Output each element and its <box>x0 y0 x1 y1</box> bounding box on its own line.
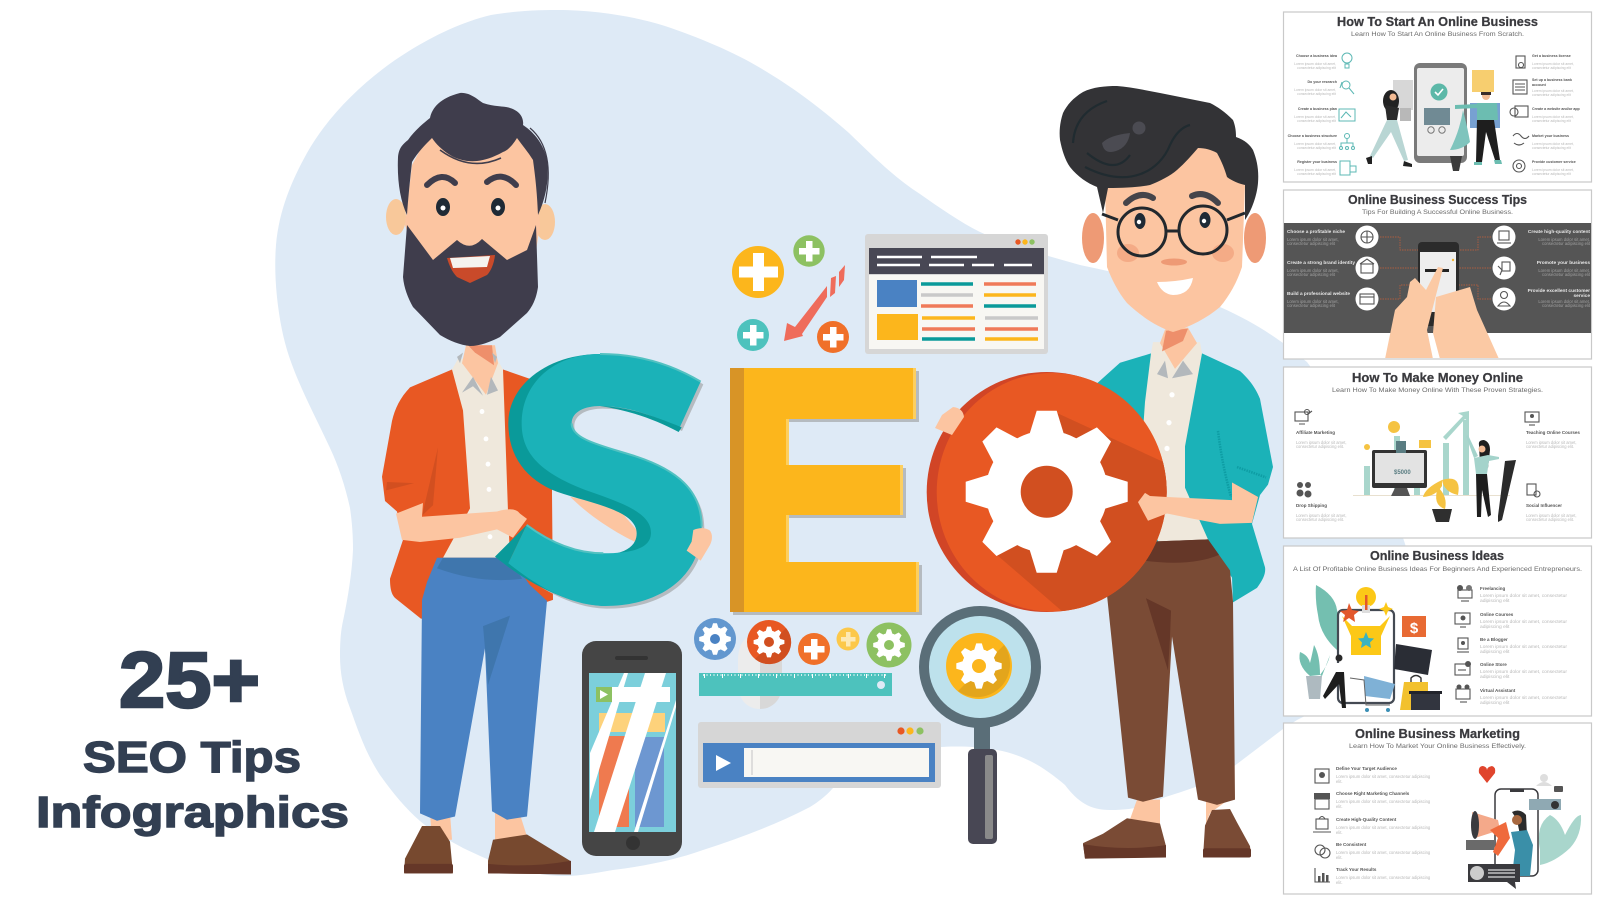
panel 1 left list: Choose a business structure <box>1288 134 1337 138</box>
panel 2 left list <box>1287 229 1355 308</box>
panel 4 woman and cart <box>1323 654 1395 712</box>
panel 4 list <box>1480 586 1567 706</box>
panel 2 subtitle: Tips For Building A Successful Online Business. <box>1362 209 1513 216</box>
panel 5 list: Lorem ipsum dolor sit amet, consectetur adipiscing <box>1336 799 1431 804</box>
panel 2 right list: service <box>1573 293 1590 299</box>
panel 5 list: Choose Right Marketing Channels <box>1336 791 1410 796</box>
panel 2 left list: Lorem ipsum dolor sit amet, <box>1287 268 1339 273</box>
panel 1 right list: account <box>1532 83 1547 87</box>
panel: How To Start An Online Business <box>1284 12 1592 182</box>
panel 3 plant <box>1364 421 1459 522</box>
panel 1 left list: Lorem ipsum dolor sit amet, <box>1294 142 1336 146</box>
panel 2 right list: consectetur adipiscing elit <box>1542 303 1591 308</box>
letter O gear <box>927 372 1185 620</box>
panel 1 right list: Lorem ipsum dolor sit amet, <box>1532 142 1574 146</box>
panel 5 heading: Online Business Marketing <box>1355 727 1520 741</box>
panel 3 text items: Lorem ipsum dolor sit amet, <box>1526 440 1577 445</box>
panel 1 right list: Set up a business bank <box>1532 78 1572 82</box>
panel 3 monitor <box>1372 441 1427 496</box>
man with beard: body <box>382 345 571 874</box>
panel 4 list: Lorem ipsum dolor sit amet, consectetur <box>1480 669 1567 675</box>
panel 1 right list: consectetur adipiscing elit <box>1532 66 1571 70</box>
panel 1 right list: consectetur adipiscing elit <box>1532 172 1571 176</box>
panel 3 baseline <box>1353 495 1510 496</box>
panel 5 list: elit. <box>1336 779 1343 784</box>
panel 2 right list <box>1528 229 1591 308</box>
panel 4 list: Lorem ipsum dolor sit amet, consectetur <box>1480 593 1567 599</box>
man with beard: arm and hand <box>396 503 527 542</box>
panel 5 list: elit. <box>1336 880 1343 885</box>
phone with hash <box>582 641 682 856</box>
panel 3 text items: Social Influencer <box>1526 503 1562 508</box>
panel 4 subtitle: A List Of Profitable Online Business Ideas For Beginners And Experienced Entrepreneurs. <box>1293 566 1582 573</box>
panel: Online Business Marketing <box>1284 723 1592 894</box>
man with glasses: head <box>1060 86 1266 332</box>
panel 3 text items <box>1296 430 1580 522</box>
panel 1 subtitle: Learn How To Start An Online Business From Scratch. <box>1351 31 1524 38</box>
panel 5 list: Define Your Target Audience <box>1336 766 1397 771</box>
panel 1 right list: Get a business license <box>1532 54 1571 58</box>
panel 4 list: Lorem ipsum dolor sit amet, consectetur <box>1480 695 1567 701</box>
panel 4 list: adipiscing elit <box>1480 649 1510 655</box>
green gear icon <box>866 622 912 668</box>
panel 5 list: Lorem ipsum dolor sit amet, consectetur adipiscing <box>1336 774 1431 779</box>
panel 3 text items: Affiliate Marketing <box>1296 430 1335 435</box>
panel 2 left list: Lorem ipsum dolor sit amet, <box>1287 237 1339 242</box>
panel 2 left list: Choose a profitable niche <box>1287 229 1345 235</box>
panel 1 right list: Lorem ipsum dolor sit amet, <box>1532 168 1574 172</box>
panel 2 right list: Lorem ipsum dolor sit amet, <box>1538 268 1590 273</box>
panel 1 left list: consectetur adipiscing elit <box>1297 119 1336 123</box>
panel 5 phone <box>1495 789 1561 876</box>
panel 2 phone and hands <box>1385 242 1499 359</box>
blue gear icon <box>694 618 736 660</box>
panel 1 right list: Create a website and/or app <box>1532 107 1581 111</box>
man with glasses: arm and hands <box>935 407 1258 524</box>
panel 1 right list <box>1532 54 1581 176</box>
panel 1 right list: Lorem ipsum dolor sit amet, <box>1532 89 1574 93</box>
panel 5 subtitle: Learn How To Market Your Online Business Effectively. <box>1349 743 1526 750</box>
panel 5 list: Lorem ipsum dolor sit amet, consectetur adipiscing <box>1336 875 1431 880</box>
search box window <box>698 722 941 788</box>
panel 4 list: Online Courses <box>1480 612 1514 617</box>
panel 1 right list: consectetur adipiscing elit <box>1532 119 1571 123</box>
panel 4 dollar card <box>1402 616 1426 637</box>
panel 1 right list: consectetur adipiscing elit <box>1532 93 1571 97</box>
arrow <box>784 265 845 341</box>
orange gear icon <box>747 620 791 664</box>
panel 5 list <box>1336 766 1431 885</box>
panel 1 left list: Register your business <box>1297 160 1337 164</box>
panel 2 left list: Lorem ipsum dolor sit amet, <box>1287 299 1339 304</box>
panel: How To Make Money Online <box>1284 367 1592 538</box>
panel 5 list: Lorem ipsum dolor sit amet, consectetur adipiscing <box>1336 825 1431 830</box>
panel 2 right list: consectetur adipiscing elit <box>1542 272 1591 277</box>
panel 4 list: adipiscing elit <box>1480 674 1510 680</box>
panel 3 text items: consectetur adipiscing elit. <box>1526 517 1574 522</box>
panel 1 heading: How To Start An Online Business <box>1337 15 1538 29</box>
magnifying glass <box>919 606 1041 844</box>
panel 4 icons <box>1455 585 1472 702</box>
panel 3 bars <box>1364 411 1469 496</box>
panel 2 right list: consectetur adipiscing elit <box>1542 241 1591 246</box>
panel 4 list: adipiscing elit <box>1480 598 1510 604</box>
panel 3 woman and pen <box>1466 435 1516 522</box>
panel 2 left list: Build a professional website <box>1287 291 1350 297</box>
panel 1 left list: Lorem ipsum dolor sit amet, <box>1294 115 1336 119</box>
panel 5 list: Lorem ipsum dolor sit amet, consectetur adipiscing <box>1336 850 1431 855</box>
panel 4 list: Be a Blogger <box>1480 637 1508 642</box>
panel 4 list: Lorem ipsum dolor sit amet, consectetur <box>1480 644 1567 650</box>
panel 2 dark band <box>1284 223 1591 333</box>
panel 4 list: Lorem ipsum dolor sit amet, consectetur <box>1480 619 1567 625</box>
panel 4 bag and box <box>1400 676 1442 710</box>
panel 3 text items: consectetur adipiscing elit. <box>1296 517 1344 522</box>
mouse <box>738 633 782 709</box>
panel 1 right list: Lorem ipsum dolor sit amet, <box>1532 62 1574 66</box>
panel 5 list: Create High-Quality Content <box>1336 817 1397 822</box>
panel 3 heading: How To Make Money Online <box>1352 371 1523 385</box>
plus icons <box>732 235 849 353</box>
panel 2 heading: Online Business Success Tips <box>1348 193 1527 207</box>
panel 5 list: elit. <box>1336 855 1343 860</box>
panel 4 list: Freelancing <box>1480 586 1506 591</box>
yellow plus <box>836 628 860 650</box>
panel 3 text items: consectetur adipiscing elit. <box>1526 444 1574 449</box>
panel 5 leaf and heart <box>1479 766 1581 865</box>
panel 3 text items: Lorem ipsum dolor sit amet, <box>1296 513 1347 518</box>
panel: Online Business Success Tips <box>1284 190 1592 359</box>
panel 3 text items: Drop Shipping <box>1296 503 1327 508</box>
background blob <box>275 10 1413 876</box>
letter S <box>495 354 712 609</box>
panel 2 left list: Create a strong brand identity <box>1287 260 1355 266</box>
panel 4 plants <box>1299 585 1340 699</box>
panel 2 right list: Lorem ipsum dolor sit amet, <box>1538 237 1590 242</box>
panel 5 list: Track Your Results <box>1336 867 1377 872</box>
panel 1 right list: Provide customer service <box>1532 160 1576 164</box>
panel 1 right list: Lorem ipsum dolor sit amet, <box>1532 115 1574 119</box>
panel 2 right list: Lorem ipsum dolor sit amet, <box>1538 299 1590 304</box>
panel: Online Business Ideas <box>1284 546 1592 716</box>
orange plus <box>798 633 830 665</box>
man with glasses: body <box>1083 328 1273 859</box>
panel 4 list: Virtual Assistant <box>1480 688 1516 693</box>
panel 5 list: elit. <box>1336 830 1343 835</box>
panel 4 credit card <box>1394 644 1432 675</box>
panel 4 list: Online Store <box>1480 662 1507 667</box>
panel 1 right list: Market your business <box>1532 134 1569 138</box>
panel 3 text items: consectetur adipiscing elit. <box>1296 444 1344 449</box>
panel 1 left list <box>1288 54 1338 176</box>
heading: 25+ SEO Tips Infographics: SEO Tips <box>83 733 301 782</box>
panel 1 left list: Choose a business idea <box>1296 54 1338 58</box>
panel 1 left list: consectetur adipiscing elit <box>1297 66 1336 70</box>
panel 2 connectors <box>1380 237 1491 299</box>
panel 5 icons <box>1313 769 1331 882</box>
panel 1 icons <box>1339 53 1529 175</box>
heading: 25+ SEO Tips Infographics: 25+ <box>119 635 260 724</box>
panel 5 list: elit. <box>1336 804 1343 809</box>
panel 3 subtitle: Learn How To Make Money Online With These Proven Strategies. <box>1332 387 1543 394</box>
panel 5 chat bubbles <box>1466 840 1520 889</box>
panel 2 icon circles <box>1356 226 1516 310</box>
panel 1 illustration <box>1366 63 1502 171</box>
panel 2 right list: Promote your business <box>1537 260 1590 266</box>
panel 2 left list: consectetur adipiscing elit <box>1287 303 1336 308</box>
panel 1 left list: consectetur adipiscing elit <box>1297 92 1336 96</box>
panel 1 right list: consectetur adipiscing elit <box>1532 146 1571 150</box>
panel 2 right list: Provide excellent customer <box>1528 288 1590 294</box>
panel 4 tablet and box <box>1338 587 1394 703</box>
panel 4 list: adipiscing elit <box>1480 700 1510 706</box>
panel 1 left list: Lorem ipsum dolor sit amet, <box>1294 88 1336 92</box>
panel 1 left list: consectetur adipiscing elit <box>1297 146 1336 150</box>
panel 1 left list: Lorem ipsum dolor sit amet, <box>1294 168 1336 172</box>
heading: 25+ SEO Tips Infographics <box>36 635 349 837</box>
panel 2 right list: Create high-quality content <box>1528 229 1590 235</box>
panel 1 left list: Create a business plan <box>1298 107 1337 111</box>
panel 4 dollar card: $ <box>1410 620 1419 637</box>
panel 3 text items: Teaching Online Courses <box>1526 430 1580 435</box>
man with beard: head <box>386 93 555 346</box>
browser window <box>865 234 1048 354</box>
panel 3 text items: Lorem ipsum dolor sit amet, <box>1526 513 1577 518</box>
panel 2 left list: consectetur adipiscing elit <box>1287 272 1336 277</box>
panel 5 woman with megaphone <box>1471 811 1533 876</box>
letter E <box>730 368 922 615</box>
panel 1 left list: consectetur adipiscing elit <box>1297 172 1336 176</box>
panel 3 monitor: $5000 <box>1394 470 1411 476</box>
panel 4 list: adipiscing elit <box>1480 624 1510 630</box>
panel 5 list: Be Consistent <box>1336 842 1367 847</box>
panel 3 icons <box>1295 410 1540 498</box>
panel 3 text items: Lorem ipsum dolor sit amet, <box>1296 440 1347 445</box>
panel 1 left list: Do your research <box>1307 80 1337 84</box>
panel 2 left list: consectetur adipiscing elit <box>1287 241 1336 246</box>
panel 4 heading: Online Business Ideas <box>1370 549 1504 563</box>
ruler <box>699 673 892 696</box>
panel 1 left list: Lorem ipsum dolor sit amet, <box>1294 62 1336 66</box>
heading: 25+ SEO Tips Infographics: Infographics <box>36 788 349 837</box>
